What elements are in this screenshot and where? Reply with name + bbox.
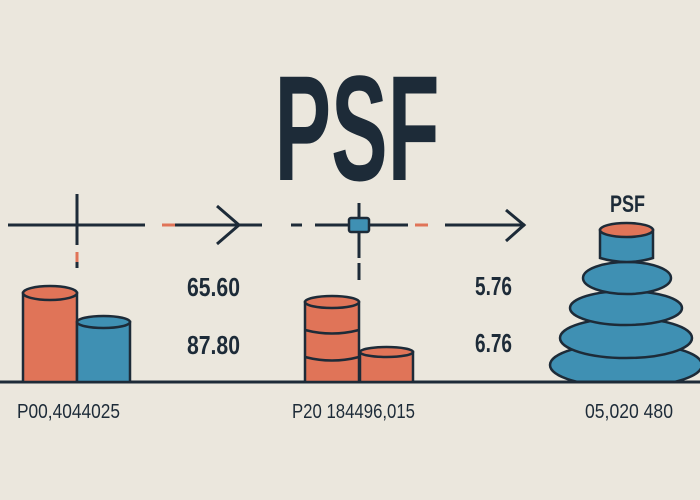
label 1: P00,4044025 — [17, 401, 120, 423]
middle cylinders chart — [305, 296, 413, 382]
left cylinders chart — [23, 286, 130, 382]
arrow 1 — [162, 206, 262, 244]
PSF stack — [550, 223, 700, 387]
values 2: 5.76 — [475, 271, 512, 301]
values 2: 6.76 — [475, 328, 512, 358]
arrow 2 — [445, 210, 525, 241]
right PSF label: PSF — [610, 191, 645, 218]
middle crosshair — [291, 203, 428, 280]
values 2 — [475, 271, 512, 358]
left crosshair — [8, 194, 145, 268]
values 1: 65.60 — [187, 272, 240, 302]
label 2: P20 184496,015 — [292, 401, 415, 423]
title: PSF — [274, 44, 440, 212]
values 1 — [187, 272, 240, 360]
values 1: 87.80 — [187, 330, 240, 360]
label 3: 05,020 480 — [585, 401, 673, 423]
baseline axis — [0, 380, 700, 384]
